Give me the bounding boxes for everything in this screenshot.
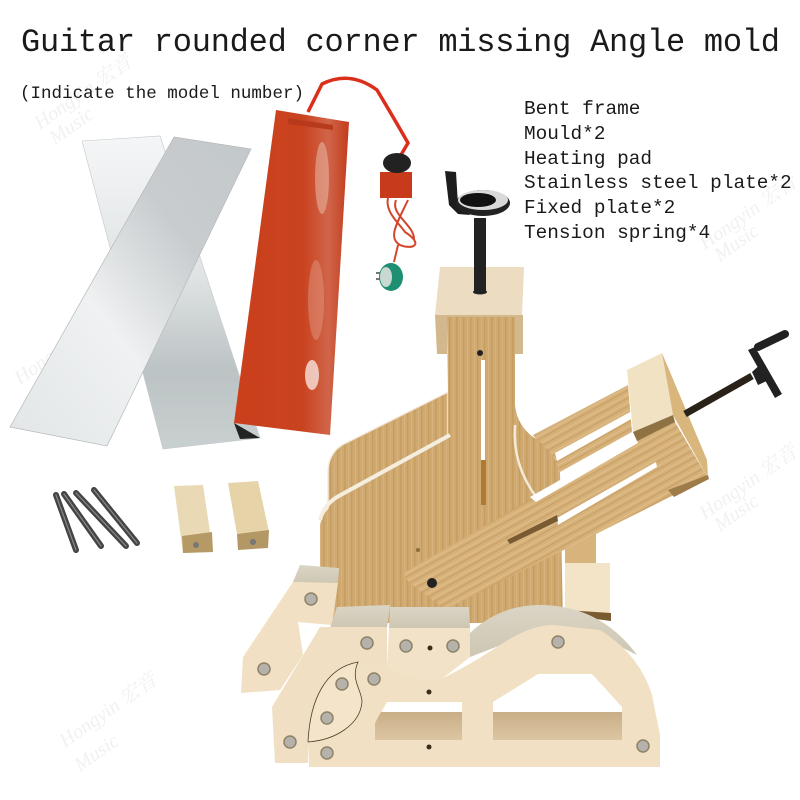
second block piece	[387, 607, 470, 680]
bolts	[258, 593, 649, 759]
main side panel	[320, 317, 563, 623]
watermarks: Hongyin 宏音	[9, 305, 118, 390]
stainless steel plates	[10, 136, 260, 449]
title: Guitar rounded corner missing Angle mold	[21, 24, 780, 61]
plug	[376, 263, 403, 291]
mould	[241, 565, 660, 767]
watermarks: Hongyin 宏音	[29, 50, 138, 135]
bent frame	[320, 171, 785, 623]
top screw with handle	[445, 171, 510, 294]
fixed plates	[174, 481, 269, 553]
parts list: Heating pad	[524, 148, 652, 170]
arm end block	[627, 353, 709, 497]
block piece	[272, 605, 390, 763]
parts list	[524, 98, 792, 244]
arm slots	[416, 437, 657, 588]
back side panel	[328, 392, 448, 520]
heating pad	[234, 78, 415, 435]
watermarks: Music	[69, 730, 123, 777]
side screw with handle	[685, 334, 785, 414]
right support block	[565, 527, 611, 621]
quarter piece outline	[308, 662, 362, 742]
subtitle: (Indicate the model number)	[20, 84, 304, 104]
watermarks: Hongyin 宏音	[694, 170, 800, 255]
center slot	[477, 350, 486, 505]
parts list: Tension spring*4	[524, 222, 710, 244]
watermarks: Hongyin 宏音	[54, 668, 163, 753]
watermarks: Music	[709, 490, 763, 537]
watermarks: Music	[709, 220, 763, 267]
strip of bent steel	[320, 435, 450, 520]
watermarks: Music	[44, 103, 98, 150]
upper left piece	[241, 565, 339, 693]
tension springs	[56, 490, 137, 550]
parts list: Bent frame	[524, 98, 640, 120]
watermarks: Music	[19, 368, 73, 415]
tilted arm board	[405, 417, 708, 607]
heating pad cord	[308, 78, 408, 160]
watermarks: Hongyin 宏音	[694, 440, 800, 525]
parts list: Fixed plate*2	[524, 197, 675, 219]
white rail slot	[555, 411, 633, 461]
window holes	[375, 674, 622, 740]
parts list: Mould*2	[524, 123, 605, 145]
top box	[435, 267, 524, 354]
back rails	[533, 385, 632, 472]
thermostat controller	[380, 153, 415, 262]
parts list: Stainless steel plate*2	[524, 172, 792, 194]
small holes	[426, 646, 432, 750]
arch back face	[470, 605, 637, 657]
main arch body	[309, 625, 660, 767]
